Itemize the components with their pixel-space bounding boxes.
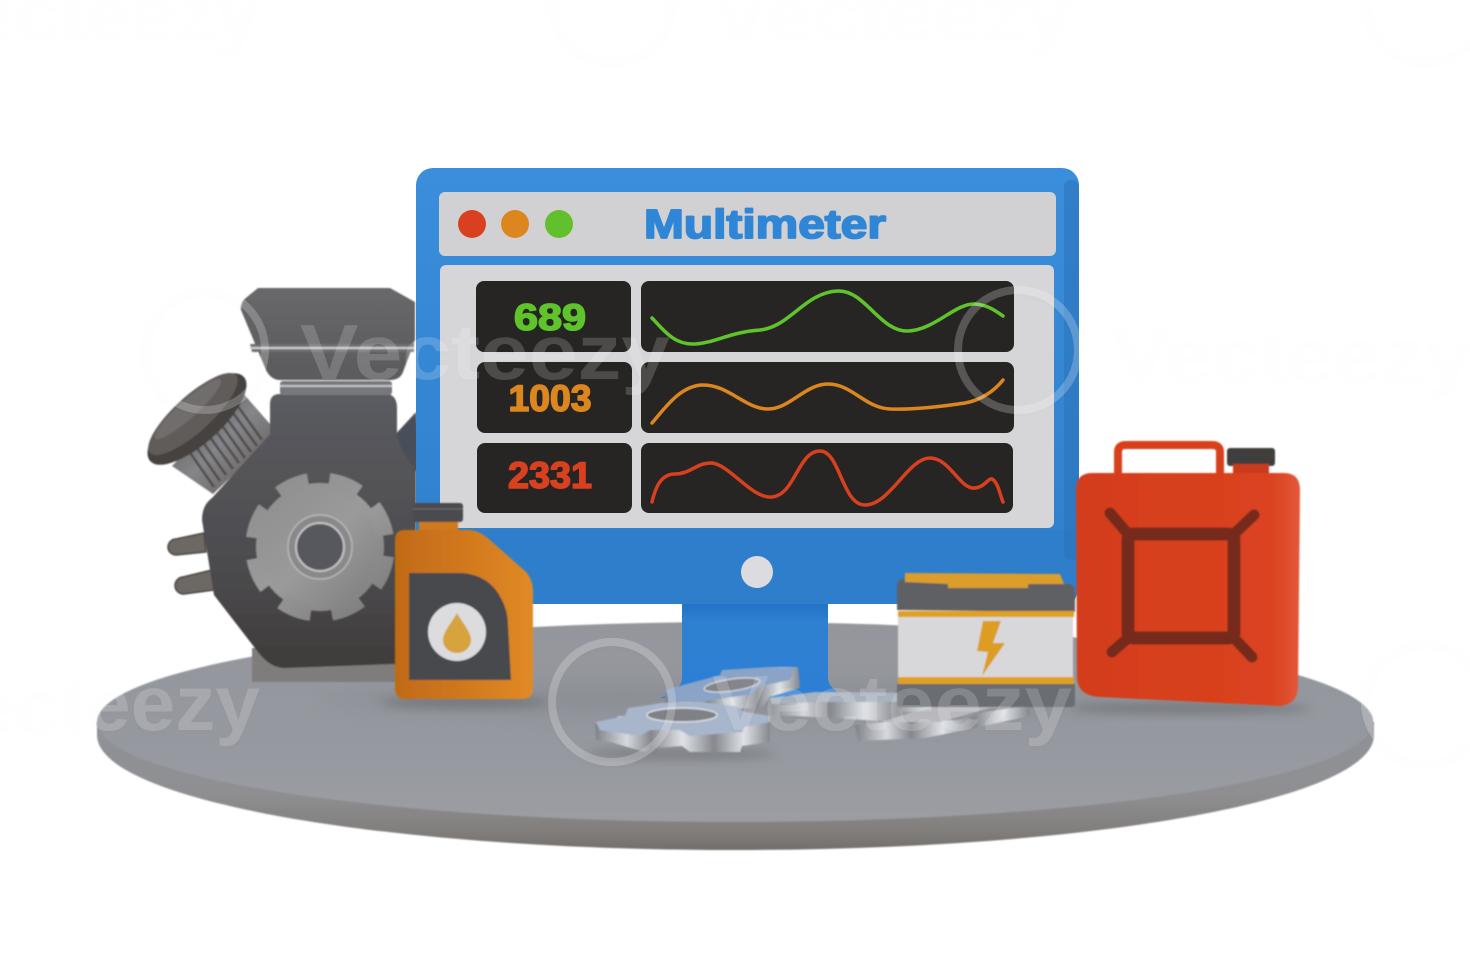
- engine rear thread: [392, 412, 420, 472]
- battery stripes: [898, 611, 1074, 617]
- battery terminals: [905, 573, 1064, 588]
- platform disc: [97, 622, 1374, 850]
- watermark: [0, 0, 1470, 762]
- monitor stand: [660, 596, 850, 698]
- can cap: [1227, 448, 1275, 466]
- engine: [134, 288, 420, 682]
- wrench front: [855, 692, 1030, 741]
- reading row: 689 green: 689: [514, 297, 586, 338]
- engine cover: [241, 288, 415, 380]
- monitor body: [416, 168, 1079, 604]
- watermark row bottom: Vecteezy: [712, 659, 1072, 747]
- watermark row top: [0, 0, 1470, 60]
- reading row: 1003 orange: [477, 362, 1014, 433]
- can body: [1076, 473, 1300, 706]
- engine base: [252, 648, 402, 682]
- window buttons: [458, 210, 573, 238]
- engine pins: [168, 533, 214, 594]
- oil drop: [443, 613, 471, 653]
- bottle label: [409, 573, 511, 680]
- bottle neck: [419, 520, 458, 532]
- tools pile: [595, 667, 1030, 752]
- watermark row middle: [145, 290, 1470, 410]
- multimeter heading: Multimeter: [644, 201, 886, 247]
- monitor: [416, 168, 1079, 698]
- watermark row bottom: [0, 642, 1470, 762]
- title bar: [439, 192, 1056, 256]
- can handle: [1118, 445, 1220, 476]
- reading row: 2331 red: 2331: [508, 455, 592, 496]
- battery base: [897, 682, 1075, 707]
- battery top: [897, 579, 1075, 612]
- label circle: [428, 603, 486, 661]
- lightning bolt: [977, 621, 1005, 676]
- battery case: [898, 612, 1073, 682]
- watermark row middle: Vecteezy: [1112, 308, 1470, 396]
- wrench back: [770, 692, 958, 722]
- reading row: 2331 red: [477, 443, 1013, 513]
- oil bottle: [395, 503, 533, 699]
- can emblem: [1110, 513, 1254, 657]
- front gear: [595, 702, 770, 752]
- watermark row middle: Vecteezy: [300, 308, 670, 396]
- engine gear: [245, 472, 395, 622]
- bottle body: [395, 530, 533, 699]
- battery: [897, 573, 1075, 707]
- reading row: 689 green: [476, 281, 1014, 352]
- readings panel: [440, 265, 1054, 528]
- engine cylinder: [134, 359, 270, 494]
- bottle cap: [413, 503, 463, 522]
- engine body: [202, 394, 416, 668]
- back gear: [665, 667, 800, 712]
- monitor power button: [741, 556, 773, 588]
- engine neck: [280, 381, 392, 395]
- reading row: 1003 orange: 1003: [508, 378, 592, 419]
- jerry can: [1076, 445, 1300, 706]
